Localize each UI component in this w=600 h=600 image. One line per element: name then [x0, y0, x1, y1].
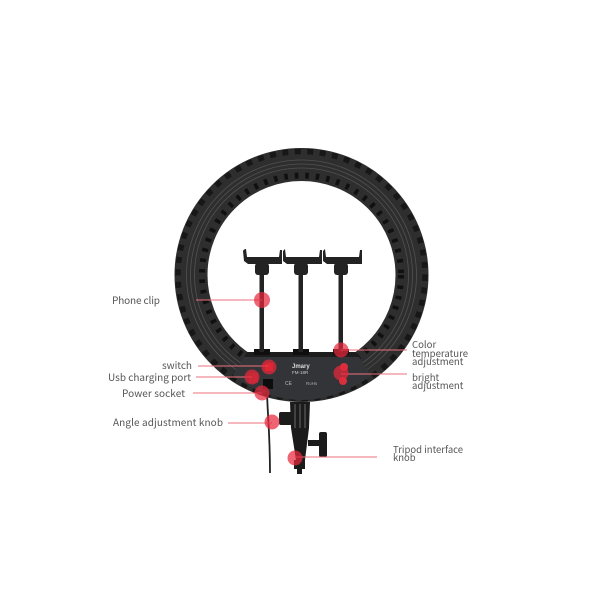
label: color temperature adjustment: temperature: [412, 346, 468, 360]
label: bright adjustment: bright: [412, 370, 439, 384]
label: angle adjustment knob: Angle adjustment knob: [113, 414, 223, 429]
clip left: [243, 249, 282, 352]
label: tripod interface knob: knob: [393, 450, 416, 464]
brand label: Jmary: [292, 364, 310, 370]
callout dots: [244, 292, 348, 466]
control box: [233, 349, 371, 400]
callout lines: [193, 300, 407, 457]
label: tripod interface knob: Tripod interface: [393, 442, 463, 456]
phone clips: [243, 249, 362, 352]
label: power socket: Power socket: [122, 385, 185, 400]
brand label: FM-18R: [292, 370, 309, 375]
label: switch: switch: [162, 357, 192, 372]
power cable: [267, 388, 270, 473]
ring light: [178, 152, 425, 398]
brand label: [285, 364, 318, 387]
label: usb charging port: Usb charging port: [108, 369, 191, 384]
label: phone clip: Phone clip: [112, 292, 160, 307]
tripod mount: [279, 402, 327, 474]
switch: [265, 363, 273, 371]
label: color temperature adjustment: Color: [412, 337, 436, 351]
usb port: [249, 373, 258, 383]
brand label: RoHs: [306, 381, 318, 386]
label: color temperature adjustment: adjustment: [412, 354, 464, 368]
power socket: [263, 379, 273, 389]
clip mounts: [254, 349, 349, 355]
brand label: CE: [285, 381, 293, 387]
clip right: [323, 249, 362, 352]
knobs: [339, 363, 348, 385]
label: bright adjustment: adjustment: [412, 378, 464, 392]
clip middle: [283, 249, 322, 352]
